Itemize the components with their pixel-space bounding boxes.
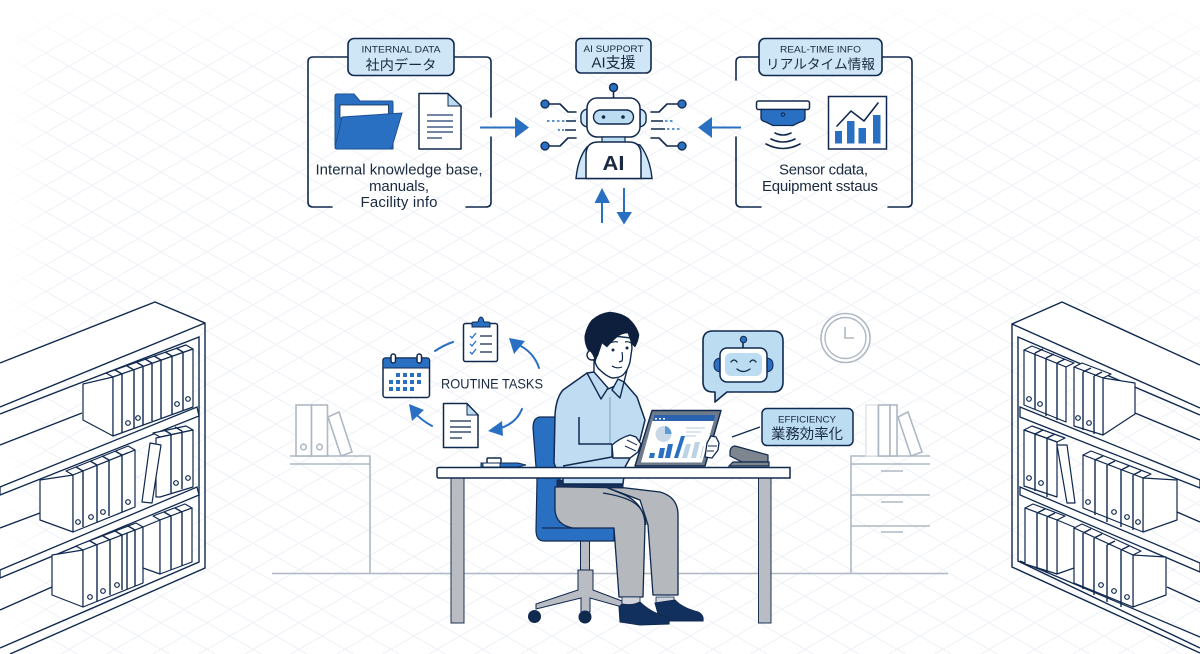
collar: [587, 372, 624, 399]
icon: calendar: [383, 354, 430, 398]
text: internal knowledge: Internal knowledge base,: [316, 162, 482, 178]
office chair: [528, 417, 622, 624]
bookshelf right: [1012, 302, 1200, 653]
speech bubble with robot: [703, 331, 783, 402]
neck: [594, 360, 627, 389]
icon: AI robot: [576, 84, 652, 178]
panel: real-time info: [736, 38, 912, 207]
callout: efficiency: 業務効率化: [771, 426, 843, 443]
binders: right shelf bottom: [1025, 504, 1166, 607]
text: AI: AI: [602, 153, 624, 175]
label: real-time info: リアルタイム情報: [766, 57, 875, 72]
label: AI support: AI支援: [592, 54, 636, 72]
binders: right shelf top: [1024, 346, 1135, 435]
routine tasks cycle: [383, 317, 543, 448]
label: real-time info: [759, 38, 882, 76]
label: internal data: [348, 38, 454, 76]
shoes: [619, 597, 703, 625]
label: AI support: [576, 38, 651, 73]
trousers: [555, 485, 678, 597]
desk top: [437, 468, 790, 478]
icon: chart: [828, 96, 886, 149]
text: facility info: Facility info: [360, 194, 438, 211]
text: sensor data: Sensor cdata,: [779, 162, 868, 178]
arrow: data to AI: [480, 117, 529, 138]
icon: clipboard: [464, 317, 498, 362]
label: real-time info: REAL-TIME INFO: [780, 44, 861, 56]
panel: internal data: [308, 38, 491, 211]
arrow: up from below: [594, 188, 610, 223]
binders on right cabinet: [866, 405, 922, 456]
head: [585, 312, 639, 378]
icon: folder: [335, 94, 402, 149]
hands: [612, 435, 719, 458]
label: internal data: INTERNAL DATA: [362, 44, 441, 56]
binders: left shelf bottom: [52, 504, 192, 607]
belt: [557, 480, 623, 488]
icon: document: [444, 404, 478, 448]
desk legs: [451, 478, 771, 623]
person at desk: [554, 312, 703, 625]
binders: left shelf middle: [40, 426, 193, 532]
binders on left cabinet: [296, 405, 352, 456]
callout: efficiency: [762, 408, 853, 446]
side cabinet left: [290, 405, 370, 573]
callout line: efficiency: [732, 427, 760, 437]
icon: circuit right: [651, 100, 686, 150]
icon: sensor: [756, 101, 810, 148]
arrow: real-time info to AI: [698, 117, 741, 138]
icon: document: [419, 94, 461, 149]
cycle arrows: [409, 338, 539, 436]
icon: circuit left: [541, 100, 576, 150]
icon: wall clock: [821, 314, 870, 362]
icon: stapler: [729, 446, 769, 466]
side cabinet right: [851, 405, 930, 573]
callout: efficiency: EFFICIENCY: [778, 414, 837, 426]
binders: left shelf top: [83, 345, 193, 436]
arrow: down: [616, 188, 632, 224]
label: AI support: AI SUPPORT: [584, 44, 644, 55]
text: equipment status: Equipment sstaus: [762, 178, 878, 195]
text: manuals: manuals,: [369, 178, 429, 195]
icon: tablet with charts: [635, 410, 721, 466]
pen on desk: [481, 458, 526, 467]
shirt: [554, 373, 645, 484]
floor line: [272, 572, 948, 574]
text: routine tasks: ROUTINE TASKS: [441, 376, 543, 392]
label: internal data: 社内データ: [366, 57, 436, 73]
bookshelf left: [0, 302, 205, 654]
binders: right shelf middle: [1024, 426, 1177, 532]
